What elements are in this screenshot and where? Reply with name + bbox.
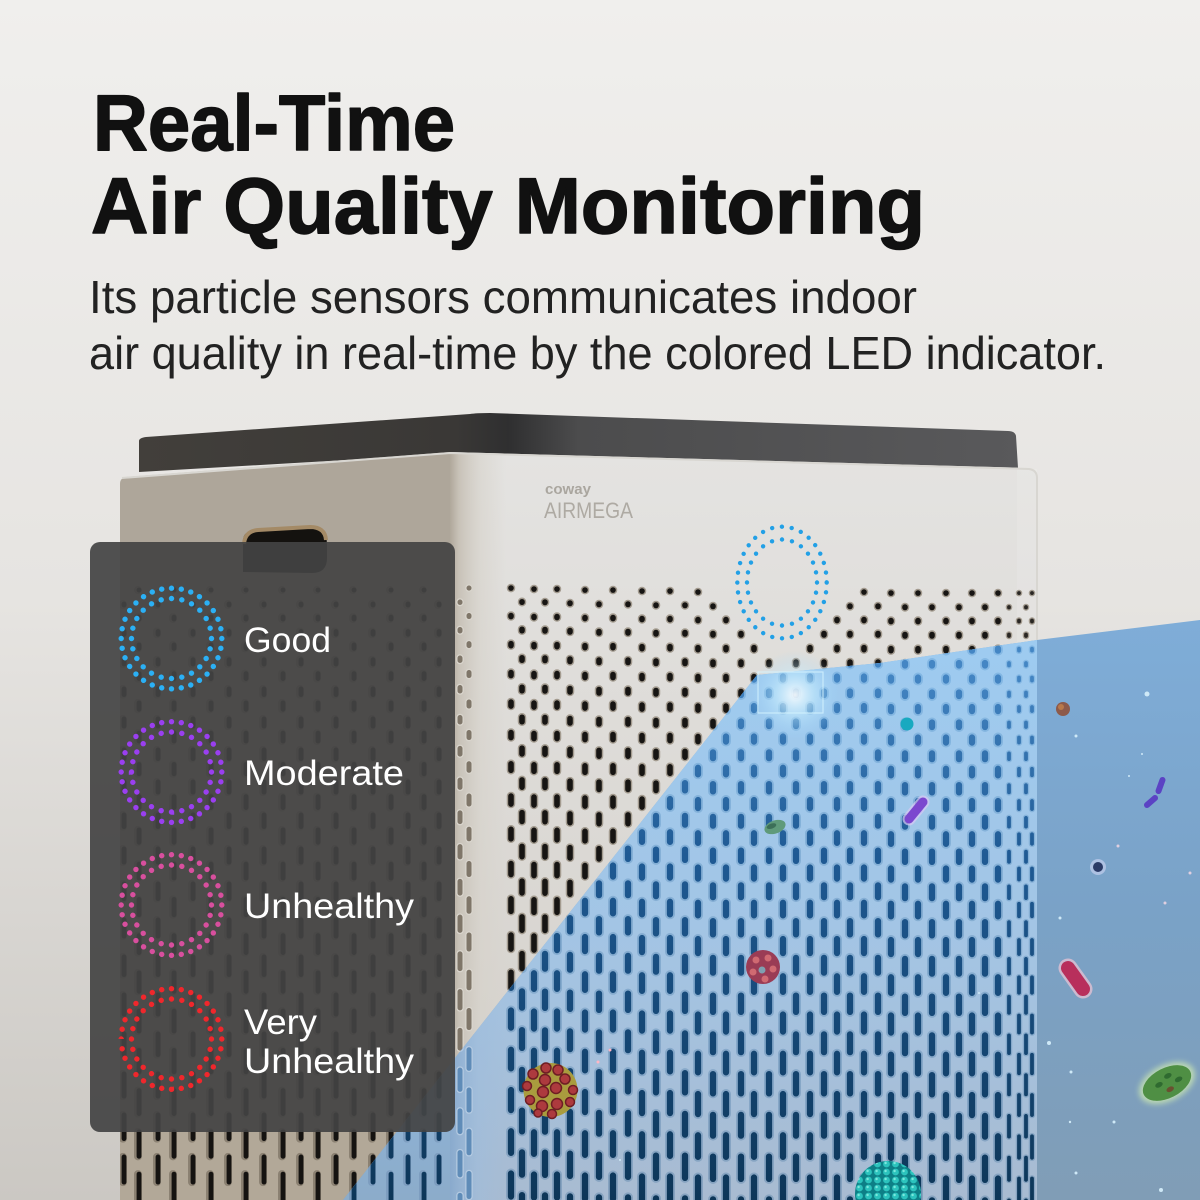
LED ring indicator: [737, 527, 827, 638]
logo: coway airmega: AIRMEGA: [544, 498, 633, 523]
legend item: Good: [121, 588, 331, 689]
purifier front face: [450, 452, 1037, 1200]
legend item: Unhealthy: Unhealthy: [244, 887, 415, 926]
germ: red rod: [1068, 968, 1083, 989]
perforations: [123, 588, 1032, 1200]
germ: large red virus: [522, 1063, 578, 1118]
panel background: [90, 542, 455, 1132]
subtitle text: air quality in real-time by the colored LED indicator.: [89, 327, 1106, 379]
legend item: Good: Good: [244, 621, 331, 660]
beam: corner overlay: [450, 1038, 474, 1200]
blue air quality beam: [343, 620, 1200, 1200]
legend item: Moderate: [121, 722, 404, 822]
legend item: Very Unhealthy: [121, 989, 415, 1089]
germ: teal virus: [855, 1161, 921, 1200]
handle recess: [243, 526, 327, 573]
subtitle text: Its particle sensors communicates indoor: [89, 271, 917, 323]
legend item: Very Unhealthy: Unhealthy: [244, 1042, 415, 1081]
purifier corner band: [450, 453, 506, 1200]
legend item: Moderate: Moderate: [244, 754, 404, 793]
sensor glow: [751, 651, 839, 739]
beam: body overlay: [455, 640, 1037, 1200]
floating particles: [596, 692, 1192, 1192]
germ: purple rod: [909, 802, 923, 819]
germ: green small: [762, 817, 788, 837]
purifier lid: [139, 413, 1018, 472]
germ: teal dot: [900, 718, 914, 730]
purifier left face: [120, 452, 450, 1200]
legend item: Very Unhealthy: Very: [244, 1003, 318, 1042]
germ: brown ball: [1056, 702, 1070, 716]
legend item: Unhealthy: [121, 855, 415, 955]
germ: purple rods pair: [1147, 780, 1162, 805]
panel: air quality legend: [90, 526, 455, 1132]
title: Air Quality Monitoring: [91, 161, 925, 250]
logo: coway airmega: [544, 481, 633, 523]
germ: green mold: [1132, 1053, 1200, 1113]
beam: perforations: [349, 645, 1036, 1200]
beam: left face overlay: [343, 1130, 450, 1200]
purifier top lip: [122, 453, 1037, 640]
beam: outside air: [340, 600, 1200, 1200]
purifier right edge: [1017, 469, 1037, 1200]
LED sensor window: [751, 651, 839, 739]
air purifier body: [120, 413, 1037, 1200]
logo: coway airmega: coway: [545, 481, 592, 498]
germ: spore: [1090, 859, 1106, 875]
title: [91, 78, 925, 250]
subtitle text: [89, 271, 1106, 379]
sensor frame: [758, 672, 823, 713]
title: Real-Time: [93, 78, 455, 167]
germ: small red virus: [746, 950, 780, 984]
